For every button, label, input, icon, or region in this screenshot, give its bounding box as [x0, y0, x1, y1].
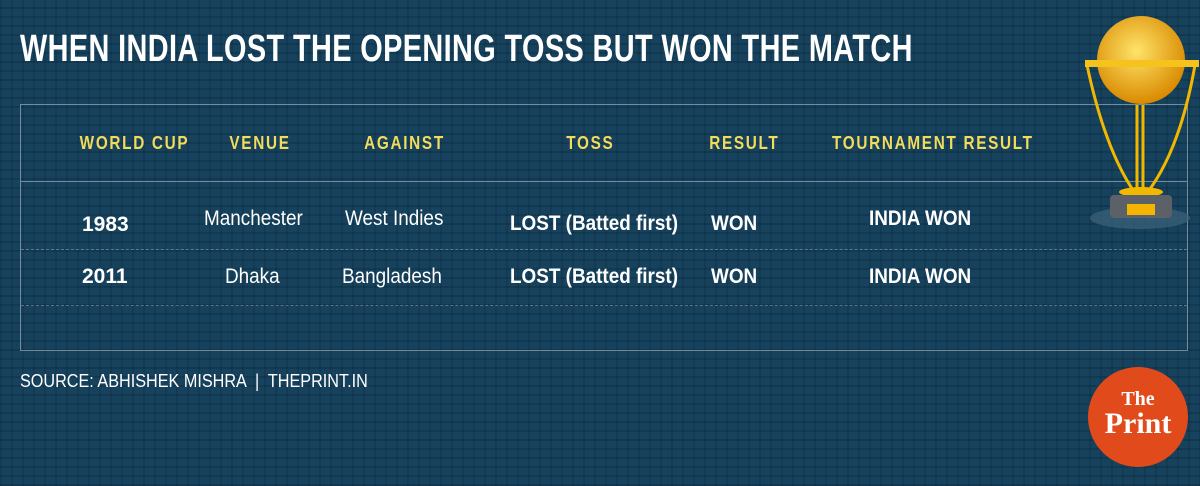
header row: AGAINST: [364, 133, 445, 153]
header row: WORLD CUP: [80, 133, 189, 153]
row 2011: Dhaka: [225, 265, 280, 288]
row 2011: WON: [711, 265, 757, 288]
logo: The Print: The: [1121, 388, 1155, 410]
header row: VENUE: [229, 133, 291, 153]
icon: trophy: [1085, 16, 1199, 229]
row 2011: [82, 265, 971, 288]
source: SOURCE: ABHISHEK MISHRA | THEPRINT.IN: [20, 371, 368, 391]
title: WHEN INDIA LOST THE OPENING TOSS BUT WON THE MATCH: [20, 28, 913, 70]
row 1983: LOST (Batted first): [510, 212, 678, 235]
logo: The Print: [1088, 367, 1188, 467]
row 2011: LOST (Batted first): [510, 265, 678, 288]
row 1983: [82, 207, 971, 236]
row 1983: West Indies: [345, 207, 443, 230]
row 1983: 1983: [82, 213, 129, 236]
logo: The Print: Print: [1105, 407, 1171, 440]
row 2011: INDIA WON: [869, 265, 971, 288]
row 1983: INDIA WON: [869, 207, 971, 230]
header row: [80, 133, 1034, 153]
header row: TOURNAMENT RESULT: [832, 133, 1034, 153]
table panel: [20, 104, 1188, 351]
row 1983: Manchester: [204, 207, 303, 230]
header row: RESULT: [709, 133, 779, 153]
row 2011: 2011: [82, 265, 128, 288]
row 1983: WON: [711, 212, 757, 235]
header row: TOSS: [566, 133, 614, 153]
row 2011: Bangladesh: [342, 265, 442, 288]
